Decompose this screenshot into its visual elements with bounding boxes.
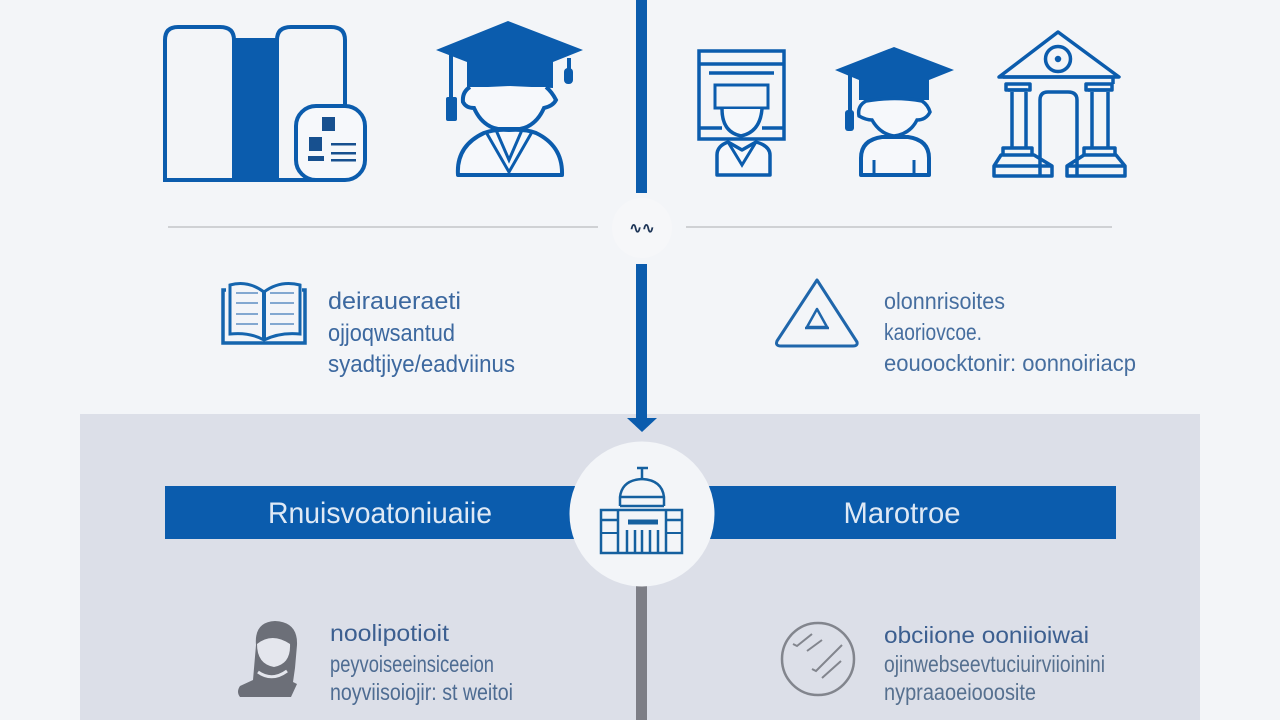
text block: lower left — [330, 620, 513, 705]
banner: right: Marotroe — [844, 497, 960, 530]
text block: lower left: noyviisoiojir: st weitoi — [330, 679, 513, 705]
banner: right — [708, 486, 1116, 539]
text block: upper left — [328, 288, 515, 378]
central node with symbol: ∿∿ — [629, 220, 655, 237]
text block: upper left: deiraueraeti — [328, 288, 461, 315]
text block: upper right — [884, 288, 1136, 376]
text block: upper left: ojjoqwsantud — [328, 320, 455, 347]
icon: classical building — [994, 32, 1125, 176]
text block: upper right: kaoriovcoe. — [884, 319, 982, 345]
icon: graduate with cap, left — [436, 21, 583, 175]
text block: upper left: syadtjiye/eadviinus — [328, 351, 515, 378]
text block: lower right: obciione ooniioiwai — [884, 622, 1089, 648]
text block: lower right: ojinwebseevtuciuirviioinini — [884, 651, 1105, 677]
central vertical line top — [636, 0, 647, 193]
central circle with capitol icon — [570, 442, 714, 586]
text block: lower left: peyvoiseeinsiceeion — [330, 651, 494, 677]
icon: capitol building — [601, 468, 682, 553]
panel: lower grey band — [80, 414, 1200, 720]
icon: graduate with cap, centre — [835, 47, 954, 175]
central node with symbol — [612, 198, 672, 258]
text block: lower right — [884, 622, 1105, 705]
text block: lower left: noolipotioit — [330, 620, 450, 646]
icon: grey person — [238, 621, 297, 697]
icon: triangle with letter — [776, 280, 857, 346]
text block: upper right: olonnrisoites — [884, 288, 1005, 314]
arrow down to lower band — [627, 264, 657, 432]
banner: left: Rnuisvoatoniuaiie — [268, 497, 492, 530]
text block: upper right: eouoocktonir: oonnoiriacp — [884, 350, 1136, 376]
icon: open book with card — [165, 27, 365, 181]
icon: student on board — [699, 51, 784, 175]
banner: left — [165, 486, 575, 539]
icon: open book — [223, 284, 305, 343]
lower central grey line — [636, 586, 647, 720]
text block: lower right: nypraaoeiooosite — [884, 679, 1036, 705]
icon: grey circle with check marks — [782, 623, 854, 695]
